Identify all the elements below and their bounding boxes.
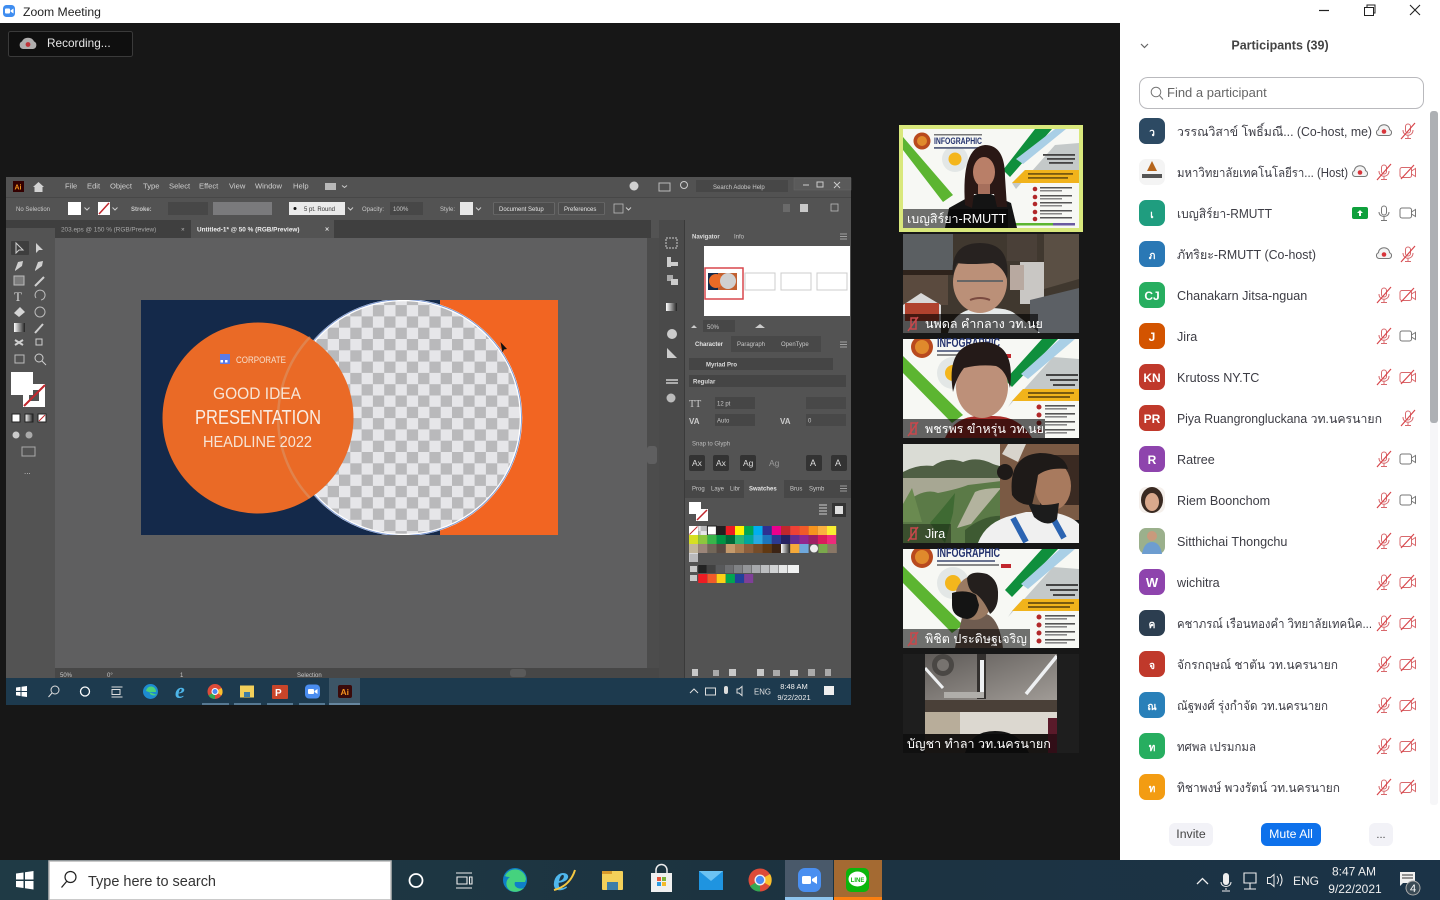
system tray: 9/22/2021 — [1328, 882, 1382, 896]
participant row 10 — [1139, 487, 1416, 513]
heading — [1141, 38, 1329, 52]
orange circle: PRESENTATION — [195, 407, 321, 429]
navigator panel: Navigator — [692, 234, 720, 240]
icon: chrome — [748, 868, 772, 892]
character panel: Paragraph — [737, 342, 765, 348]
participant row 2: มหาวิทยาลัยเทคโนโลยีรา... (Host) — [1177, 165, 1348, 180]
character panel: A — [810, 458, 816, 468]
inner windows taskbar: P — [275, 688, 282, 699]
swatches panel: Swatches — [749, 486, 777, 492]
name label: นพดล คำกลาง วท.นย — [925, 317, 1043, 331]
title bar — [0, 0, 1120, 23]
icon: edge — [503, 868, 527, 892]
name label — [903, 419, 1047, 438]
participant row 4: ภัทริยะ-RMUTT (Co-host) — [1177, 248, 1316, 262]
swatches panel: Symb — [809, 486, 825, 492]
participant row 7: Krutoss NY.TC — [1177, 371, 1259, 385]
video tile 3: พชรพร ขำหรุ่น: INFOGRAPHIC — [937, 335, 1000, 350]
navigator panel: Info — [734, 234, 745, 240]
participant row 17: ท — [1149, 784, 1156, 795]
control bar: 100% — [393, 207, 409, 213]
participant row 10: Riem Boonchom — [1177, 494, 1270, 508]
participant row 16 — [1139, 733, 1416, 759]
icon: microsoft store — [651, 864, 672, 892]
video tile 4: Jira — [903, 444, 1079, 543]
participant row 12: W — [1146, 575, 1159, 590]
character panel: VA — [780, 417, 791, 426]
control bar: Opacity: — [362, 207, 384, 213]
character panel: Character — [695, 342, 724, 348]
control bar: Preferences — [564, 207, 596, 213]
system tray: 4 — [1410, 883, 1416, 895]
mute all button — [1261, 823, 1321, 846]
orange circle — [162, 322, 354, 514]
swatches panel: Brus — [790, 486, 802, 492]
participant row 9: Ratree — [1177, 453, 1215, 467]
participant row 11: Sitthichai Thongchu — [1177, 535, 1287, 549]
menu bar: Ai — [14, 184, 22, 192]
orange circle: HEADLINE 2022 — [203, 434, 312, 451]
character panel: A — [835, 458, 841, 468]
video tile 5: พิชิต ประดิษฐเจริญ — [903, 545, 1079, 648]
participant row 1: วรรณวิสาข์ โพธิ์มณี... (Co-host, me) — [1177, 122, 1372, 139]
participant row 14 — [1139, 651, 1416, 677]
participant row 15: ณัฐพงศ์ รุ่งกำจัด วท.นครนายก — [1177, 699, 1328, 714]
participant row 17 — [1139, 774, 1416, 800]
tools panel: T — [14, 289, 22, 304]
video tile 2: นพดล คำกลาง — [903, 234, 1079, 333]
name label: เบญสิร์ยา-RMUTT — [907, 212, 1007, 226]
name label — [903, 314, 1043, 333]
control bar: Style: — [440, 207, 455, 213]
inner windows taskbar: 8:48 AM — [780, 682, 808, 691]
canvas — [55, 238, 651, 668]
search box — [1140, 78, 1424, 108]
participant row 7 — [1139, 364, 1416, 390]
video tile 6: บัญชา ทำลา — [907, 654, 1057, 753]
navigator panel — [685, 228, 851, 332]
menu bar: View — [229, 182, 246, 190]
inner windows taskbar: e — [175, 678, 185, 703]
character panel: Ag — [743, 458, 754, 468]
participant row 17: ทิชาพงษ์ พวงรัตน์ วท.นครนายก — [1177, 781, 1340, 795]
icon: zoom app — [3, 5, 15, 17]
search box: Type here to search — [88, 874, 216, 890]
status bar — [55, 668, 659, 679]
scrollbar — [1430, 111, 1438, 805]
menu bar: Effect — [199, 182, 219, 190]
name label: บัญชา ทำลา วท.นครนายก — [907, 737, 1051, 751]
participant row 14: จักรกฤษณ์ ชาตัน วท.นครนายก — [1177, 658, 1338, 672]
video tile 3: พชรพร ขำหรุ่น — [903, 335, 1079, 438]
window title: Zoom Meeting — [23, 5, 101, 19]
participant row 4: ภ — [1149, 251, 1156, 262]
tools panel: ... — [24, 467, 31, 476]
menu bar: Help — [293, 182, 309, 190]
participant row 5: CJ — [1144, 289, 1160, 303]
menu bar: Object — [110, 182, 133, 190]
vertical scrollbar — [647, 238, 659, 668]
participant row 9: R — [1148, 453, 1157, 467]
menu bar — [6, 177, 851, 197]
windows taskbar — [0, 858, 1440, 900]
name label: พิชิต ประดิษฐเจริญ — [925, 632, 1027, 646]
participant row 3: เบญสิร์ยา-RMUTT — [1177, 207, 1272, 221]
icon: line — [834, 860, 882, 900]
name label — [903, 524, 951, 543]
participant row 3 — [1139, 200, 1416, 226]
control bar: Stroke: — [131, 207, 152, 213]
participant row 12: wichitra — [1176, 576, 1220, 590]
icon: windows start — [16, 871, 34, 890]
participant row 6 — [1139, 323, 1416, 349]
participant row 5: Chanakarn Jitsa-nguan — [1177, 289, 1307, 303]
name label: Jira — [925, 527, 945, 541]
icon: internet explorer: e — [553, 858, 569, 898]
icon: file explorer — [602, 871, 623, 890]
more button: ... — [1376, 829, 1386, 841]
character panel: Ag — [769, 458, 780, 468]
mute all button: Mute All — [1269, 827, 1313, 841]
invite button: Invite — [1176, 827, 1206, 841]
system tray: ENG — [1293, 874, 1319, 888]
character panel: Auto — [717, 418, 730, 424]
participant row 8: PR — [1144, 412, 1161, 426]
participant row 9 — [1139, 446, 1416, 472]
control bar — [6, 197, 851, 220]
artboard — [141, 300, 558, 536]
participant row 13: คชาภรณ์ เรือนทองคำ วิทยาลัยเทคนิค... — [1177, 617, 1372, 631]
icon: zoom — [785, 860, 833, 900]
swatch grid — [689, 526, 837, 583]
document tabs: Untitled-1* @ 50 % (RGB/Preview) — [197, 226, 299, 234]
tools panel — [6, 228, 55, 678]
character panel: Ax — [716, 458, 727, 468]
character panel: OpenType — [781, 342, 809, 348]
participant row 3: เ — [1150, 210, 1154, 221]
video tile 1: เบญสิร์ยา-RMUTT: INFOGRAPHIC — [934, 136, 982, 147]
control bar: No Selection — [16, 207, 50, 213]
icon: task view — [456, 873, 472, 888]
participant row 15: ณ — [1147, 702, 1157, 713]
status bar: 1 — [180, 673, 184, 679]
dock icon strip — [659, 220, 685, 678]
invite button — [1169, 823, 1213, 846]
heading: Participants (39) — [1231, 38, 1329, 52]
menu bar: File — [65, 182, 77, 190]
participant row 5 — [1139, 282, 1416, 308]
inner windows taskbar: Ai — [340, 687, 349, 697]
window controls — [1319, 5, 1420, 16]
participant row 11 — [1139, 528, 1416, 554]
video tile 1: เบญสิร์ยา-RMUTT — [899, 125, 1083, 232]
participant row 12 — [1139, 569, 1416, 595]
participant row 6: J — [1149, 330, 1155, 344]
document tabs: × — [181, 226, 185, 234]
character panel: VA — [689, 417, 700, 426]
shared screen: illustrator window — [6, 177, 851, 679]
participant row 7: KN — [1143, 371, 1161, 385]
icon: mail — [699, 871, 723, 890]
participant row 13 — [1139, 610, 1416, 636]
name label: พชรพร ขำหรุ่น วท.นย. — [925, 422, 1047, 437]
icon: cortana — [410, 874, 422, 887]
control bar: 5 pt. Round — [304, 207, 335, 213]
participant row 1 — [1139, 118, 1415, 144]
document tabs: 203.eps @ 150 % (RGB/Preview) — [61, 226, 156, 234]
character panel: Myriad Pro — [706, 362, 737, 368]
participant row 15 — [1139, 692, 1416, 718]
character panel: Snap to Glyph — [692, 442, 730, 448]
name label — [903, 734, 1057, 753]
system tray — [1197, 864, 1420, 896]
orange circle: GOOD IDEA — [213, 384, 302, 403]
participant row 13: ค — [1149, 620, 1156, 631]
name label — [903, 209, 1008, 228]
inner windows taskbar — [6, 678, 851, 705]
status bar: Selection — [297, 673, 322, 679]
inner windows taskbar: 9/22/2021 — [777, 693, 811, 702]
participant row 8: Piya Ruangrongluckana วท.นครนายก — [1177, 412, 1382, 426]
more button — [1369, 823, 1393, 846]
orange circle: CORPORATE — [236, 355, 286, 365]
control bar: Document Setup — [499, 207, 544, 213]
swatches panel: Libr — [730, 486, 740, 492]
character panel: Ax — [692, 458, 703, 468]
icon: mouse cursor — [500, 342, 507, 352]
search box — [49, 861, 391, 900]
menu bar: Select — [169, 182, 191, 190]
recording indicator: Recording... — [47, 36, 111, 50]
system tray: 8:47 AM — [1332, 864, 1376, 878]
character panel: TT — [689, 399, 701, 410]
menu bar: Type — [143, 182, 159, 190]
transparent image circle — [313, 300, 522, 535]
swatches panel: Prog — [692, 486, 705, 492]
document tabs — [6, 220, 651, 238]
participant row 8 — [1139, 405, 1415, 431]
character panel — [685, 336, 851, 476]
menu bar: Edit — [87, 182, 101, 190]
participant row 14: จ — [1149, 661, 1155, 672]
swatches panel: Laye — [711, 486, 725, 492]
navigator panel: 50% — [707, 325, 720, 331]
participant row 4 — [1139, 241, 1415, 267]
swatches panel — [685, 480, 851, 678]
video tile 5: พิชิต ประดิษฐเจริญ: INFOGRAPHIC — [937, 545, 1000, 560]
character panel: 12 pt — [717, 402, 731, 408]
participant row 1: ว — [1149, 128, 1155, 139]
character panel: Regular — [693, 380, 716, 386]
menu bar: Window — [255, 182, 283, 190]
character panel: 0 — [808, 418, 812, 424]
status bar: 0° — [107, 673, 113, 679]
participant row 16: ท — [1149, 743, 1156, 754]
icon: line: LINE — [851, 878, 864, 884]
participant row 16: ทศพล เปรมกมล — [1177, 740, 1256, 754]
menu bar: Search Adobe Help — [713, 185, 765, 191]
participant row 6: Jira — [1177, 330, 1197, 344]
fill and stroke swatches — [11, 372, 46, 422]
document tabs: × — [325, 226, 329, 234]
status bar: 50% — [60, 673, 73, 679]
inner windows taskbar: ENG — [754, 688, 771, 696]
search box: Find a participant — [1167, 85, 1267, 100]
panel: participants — [1120, 0, 1440, 860]
name label — [903, 629, 1030, 648]
participant row 2 — [1139, 159, 1416, 185]
recording indicator — [8, 32, 132, 56]
